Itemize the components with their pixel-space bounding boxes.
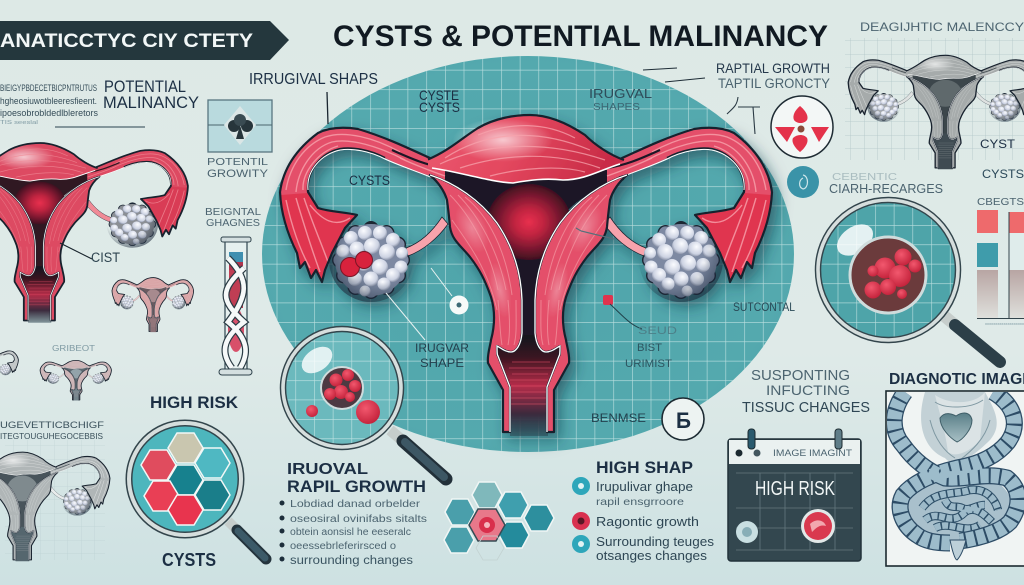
label: suspected tissue changes: TISSUC CHANGES [742, 400, 870, 416]
micro text lines left: ITEGTOUGUHEGOCEBBIS [0, 431, 103, 441]
magnifier: center lens [283, 329, 446, 479]
top left micro text: BIEIGYPBDECETBICPNTRUTUS [0, 83, 97, 93]
label: rapid growth with leaders: RAPTIAL GROWTH [716, 60, 830, 76]
list: high shap: Irupulivar ghape [596, 479, 693, 494]
bead chain outlines [894, 392, 1018, 543]
magnifier: hexagon lens [129, 423, 266, 559]
bottom left gray uterus on grid [0, 440, 110, 561]
label: cist: CIST [91, 250, 120, 265]
micro text lines left: UGEVETTICBCHIGF [0, 420, 105, 430]
labels: cyst right: CYSTS [982, 167, 1024, 181]
ellipse labels: SHAPES [593, 101, 640, 113]
bar chart right: xxxxxxxxxxxxxxxxxxx [985, 321, 1024, 326]
bullet list: oeessebrleferirsced o [290, 541, 396, 552]
calendar card: high risk: IMAGE IMAGINT [773, 448, 853, 458]
red nodules on left ovary [340, 252, 372, 276]
label: beignal shagnes [205, 206, 261, 229]
bar chart right [977, 196, 1024, 326]
icon: teal badge [787, 166, 819, 198]
small uterus: gray with pink tubes [40, 360, 111, 400]
icon: letter circle with benmse label [591, 398, 704, 440]
icon: sample image box [208, 100, 272, 152]
ellipse labels: CYSTS [349, 173, 390, 188]
heading: iruoval rapil growth [287, 461, 426, 496]
calendar card: high risk: HIGH RISK [755, 478, 836, 500]
small pointer mark [727, 97, 760, 134]
label: irrugival shaps: IRRUGIVAL SHAPS [249, 71, 378, 88]
label: potential malinancy: MALINANCY [103, 94, 199, 112]
label: cysts under lens: CYSTS [162, 550, 216, 570]
heading: iruoval rapil growth: IRUOVAL [287, 461, 368, 478]
label: potential malinancy: POTENTIAL [104, 78, 186, 96]
heading: iruoval rapil growth: RAPIL GROWTH [287, 477, 426, 496]
label: rapid growth with leaders: TAPTIL GRONCTY [718, 76, 830, 91]
marker: red square with labels: BIST [637, 342, 662, 354]
top left micro text: hgheosiuwotbleeresfieent. [0, 96, 97, 106]
top left micro text: TIS seeslal [0, 120, 38, 126]
pointer on uterus [576, 228, 614, 239]
top left banner: ANATICCTYC CIY CTETY [0, 31, 253, 52]
labels: cyst right [980, 137, 1024, 181]
label: suspected tissue changes [742, 367, 870, 416]
bullet list [280, 499, 427, 567]
tail [950, 540, 966, 560]
marker: white dot [431, 268, 468, 314]
label: irregular shape leader: IRUGVAR [415, 341, 469, 355]
label: irregular shape leader: SHAPE [420, 356, 464, 370]
small uterus: left edge gray [0, 349, 18, 394]
list: high shap: HIGH SHAP [596, 458, 693, 477]
label: gribeot: GRIBEOT [52, 343, 95, 353]
teal grid ellipse backdrop [262, 56, 794, 452]
list: high shap [572, 458, 715, 563]
label: potential malinancy [103, 78, 199, 112]
lower loop fill [908, 483, 1010, 540]
icon: letter circle with benmse label: BENMSE [591, 411, 646, 425]
label: beignal shagnes: GHAGNES [206, 217, 260, 229]
label: cist [60, 243, 120, 265]
diagnostic image panel [886, 391, 1024, 566]
hexagon cluster [444, 482, 554, 560]
label: irrugival shaps [249, 71, 378, 124]
label: beignal shagnes: BEIGNTAL [205, 206, 261, 218]
icon: letter circle with benmse label: Б [676, 408, 691, 433]
list: high shap: Ragontic growth [596, 514, 699, 529]
label: sutcontal: SUTCONTAL [733, 300, 795, 314]
bullet list: obtein aonsisl he eeseralc [290, 527, 411, 538]
ellipse labels: CYSTE [419, 87, 459, 103]
label: potential growth: POTENTIL [207, 156, 268, 168]
marker: red square with labels: URIMIST [625, 358, 672, 370]
top left micro text [0, 83, 145, 127]
label: genetic charge changes: CEBENTIC [832, 171, 898, 183]
title: CYSTS & POTENTIAL MALINANCY [333, 20, 828, 53]
label: suspected tissue changes: SUSPONTING [751, 367, 850, 384]
label: rapid growth with leaders [643, 60, 830, 91]
ellipse labels: CYSTS [419, 99, 460, 115]
central cone with heart-shaped cavity [921, 392, 997, 462]
icon: radiation symbol [771, 96, 833, 158]
high risk label: HIGH RISK [150, 393, 239, 412]
ellipse labels [349, 86, 652, 188]
magnifier: right lens [818, 200, 1000, 362]
top left banner [0, 21, 289, 60]
left red uterus diagram [0, 143, 188, 323]
label: suspected tissue changes: INFUCTING [766, 382, 850, 398]
small uterus: pink center-left [112, 278, 194, 332]
bar chart right: CBEGTS [977, 196, 1024, 208]
list: high shap: Surrounding teuges [596, 534, 715, 549]
top left micro text: ipoesobrobldedlbleretors [0, 108, 98, 118]
label: potential growth [207, 156, 269, 180]
top right gray uterus on grid [845, 38, 1024, 169]
calendar card: high risk [728, 429, 861, 561]
list: high shap: otsanges changes [596, 549, 707, 563]
heading: diagnostic malignancy: DEAGIJHTIC MALENCCY [860, 20, 1024, 34]
ellipse labels: IRUGVAL [589, 86, 652, 101]
list: high shap: rapil ensgrroore [596, 496, 684, 508]
label: potential growth: GROWITY [207, 168, 269, 180]
marker: red square with labels [603, 295, 677, 370]
label: irregular shape leader [386, 293, 469, 370]
labels: cyst right: CYST [980, 137, 1016, 151]
bullet list: surrounding changes [290, 555, 413, 567]
label: genetic charge changes [829, 171, 943, 196]
micro text lines left [0, 420, 105, 441]
bullet list: Lobdiad danad orbelder [290, 499, 421, 510]
icon: test tube with helix [219, 237, 252, 375]
marker: red square with labels: SEUD [638, 325, 677, 337]
bullet list: oseosiral ovinifabs sitalts [290, 514, 427, 525]
label: genetic charge changes: CIARH-RECARGES [829, 182, 943, 196]
main uterus illustration [280, 115, 772, 436]
